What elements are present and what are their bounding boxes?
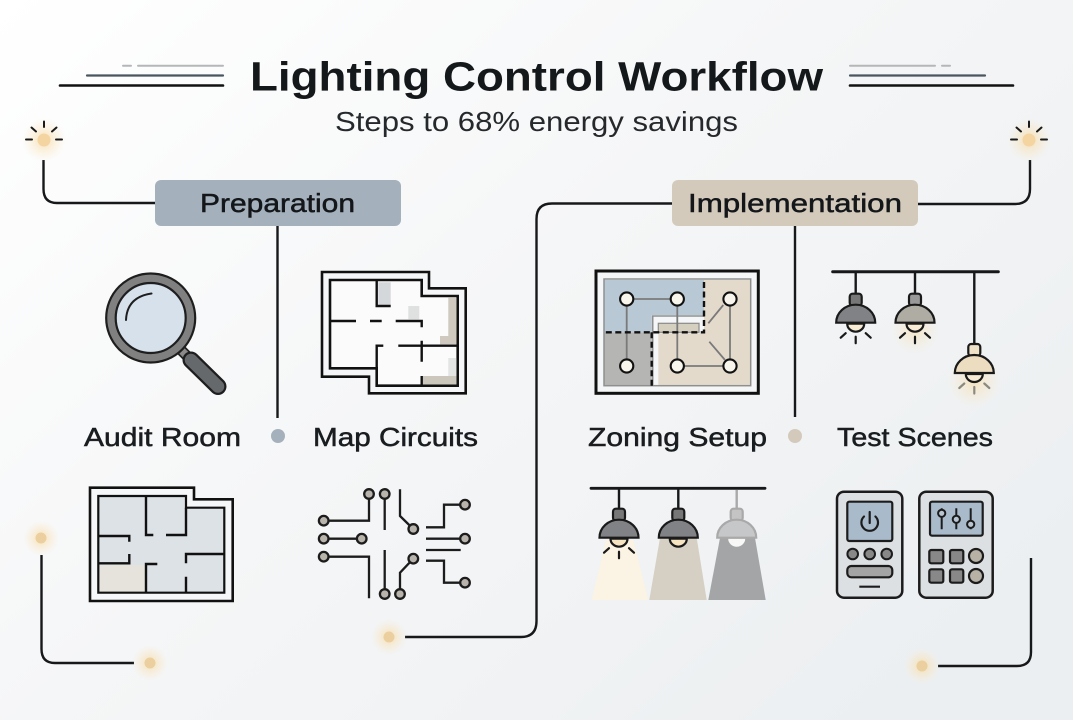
icon: slider control panel xyxy=(919,492,993,598)
icon: test scene pendant lamps xyxy=(833,272,1001,408)
connector: bottom right xyxy=(938,558,1031,666)
label: Zoning Setup: Zoning Setup xyxy=(588,422,767,452)
panel heading: Implementation: Implementation xyxy=(688,188,902,218)
subtitle: Steps to 68% energy savings xyxy=(335,106,738,137)
icon: circuit diagram xyxy=(319,489,470,599)
title lines left xyxy=(60,66,223,86)
marker dot: Implementation xyxy=(788,429,802,443)
title: Lighting Control Workflow xyxy=(250,54,823,100)
glow dot: bottom left xyxy=(132,645,168,681)
icon: zoning map xyxy=(596,271,758,393)
connector: Implementation to divider xyxy=(794,226,796,417)
icon: floor plan map xyxy=(322,272,466,393)
connector: left sun to Preparation xyxy=(44,160,155,203)
icon: magnifying glass xyxy=(106,274,218,386)
connector: bottom left xyxy=(42,555,134,663)
glow dot: bottom center xyxy=(371,619,407,655)
label: Map Circuits: Map Circuits xyxy=(313,422,478,452)
label: Test Scenes: Test Scenes xyxy=(837,422,993,452)
connector: Implementation to right sun xyxy=(918,160,1030,204)
panel heading: Implementation xyxy=(672,180,918,226)
label: Audit Room: Audit Room xyxy=(84,422,241,452)
icon: left sun xyxy=(22,118,66,162)
panel heading: Preparation: Preparation xyxy=(200,188,355,218)
title lines right xyxy=(850,66,1013,86)
connector: Implementation to lower glow dot xyxy=(405,204,672,637)
icon: floor plan zones xyxy=(90,488,233,601)
glow dot: bottom right xyxy=(904,648,940,684)
icon: pendant lamps with light beams xyxy=(591,488,766,600)
connector: Preparation to divider xyxy=(276,226,279,418)
glow dot: left middle xyxy=(23,520,59,556)
icon: power control panel xyxy=(837,492,902,598)
marker dot: Preparation xyxy=(271,429,285,443)
panel heading: Preparation xyxy=(155,180,401,226)
icon: right sun xyxy=(1007,118,1051,162)
